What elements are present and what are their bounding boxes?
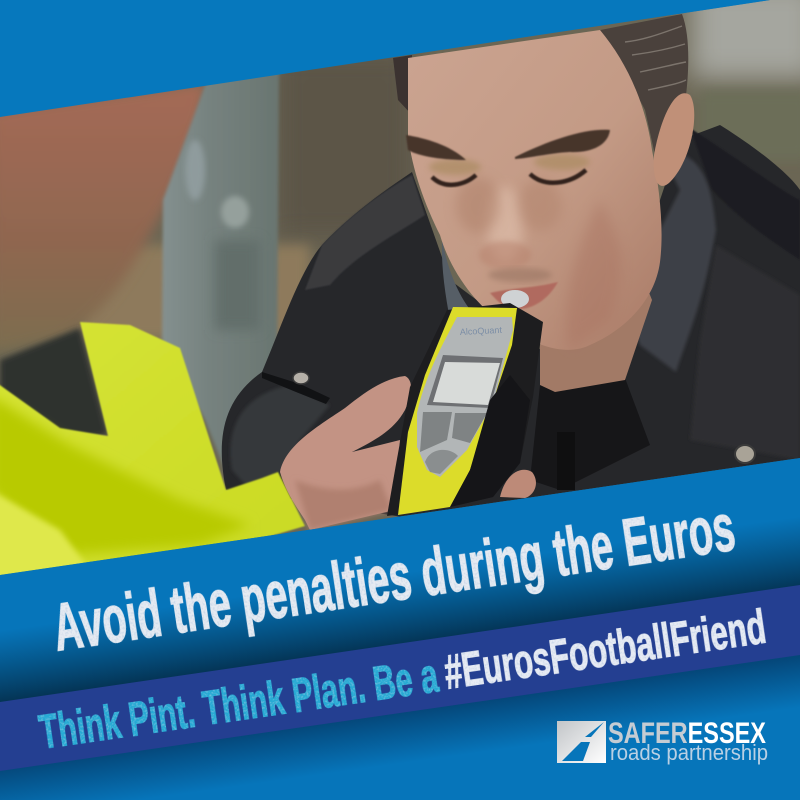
shadow above navy band: [0, 513, 800, 703]
shadow below navy band: [0, 654, 800, 800]
mouth: [490, 282, 558, 309]
face: [408, 30, 662, 350]
logo: Safer Essex Roads Partnership: [557, 717, 768, 765]
facial shading: [456, 178, 616, 335]
logo icon: road: [557, 721, 606, 763]
blurred head of officer: [0, 82, 207, 352]
device brand label: AlcoQuant: [460, 325, 503, 337]
neck: [540, 294, 652, 392]
closed eyes: [432, 170, 586, 185]
black jacket: [222, 125, 800, 530]
strapline: think pint, think plan: Think Pint. Think Plan. Be a: [36, 649, 442, 760]
hair: [393, 14, 688, 155]
photo: breath test at the roadside: [0, 0, 800, 590]
lower blue panel: [0, 458, 800, 800]
navy strap band: [0, 585, 800, 771]
officer's hand: [280, 376, 536, 530]
breathalyser mouthpiece: [501, 290, 529, 308]
breathalyser device: [387, 303, 543, 516]
eye sockets: [429, 154, 590, 175]
officer's sleeve and hi-vis jacket: [0, 322, 305, 590]
ear: [654, 93, 694, 186]
eyebrows: [406, 130, 610, 160]
photo background: blurred trees and field: [0, 0, 800, 580]
grey metal post: [162, 70, 280, 470]
logo wordmark: SAFERESSEX: [608, 717, 766, 750]
logo tagline: roads partnership: [610, 740, 768, 765]
top blue diagonal band: [0, 0, 770, 117]
jacket snap buttons: [293, 372, 755, 463]
